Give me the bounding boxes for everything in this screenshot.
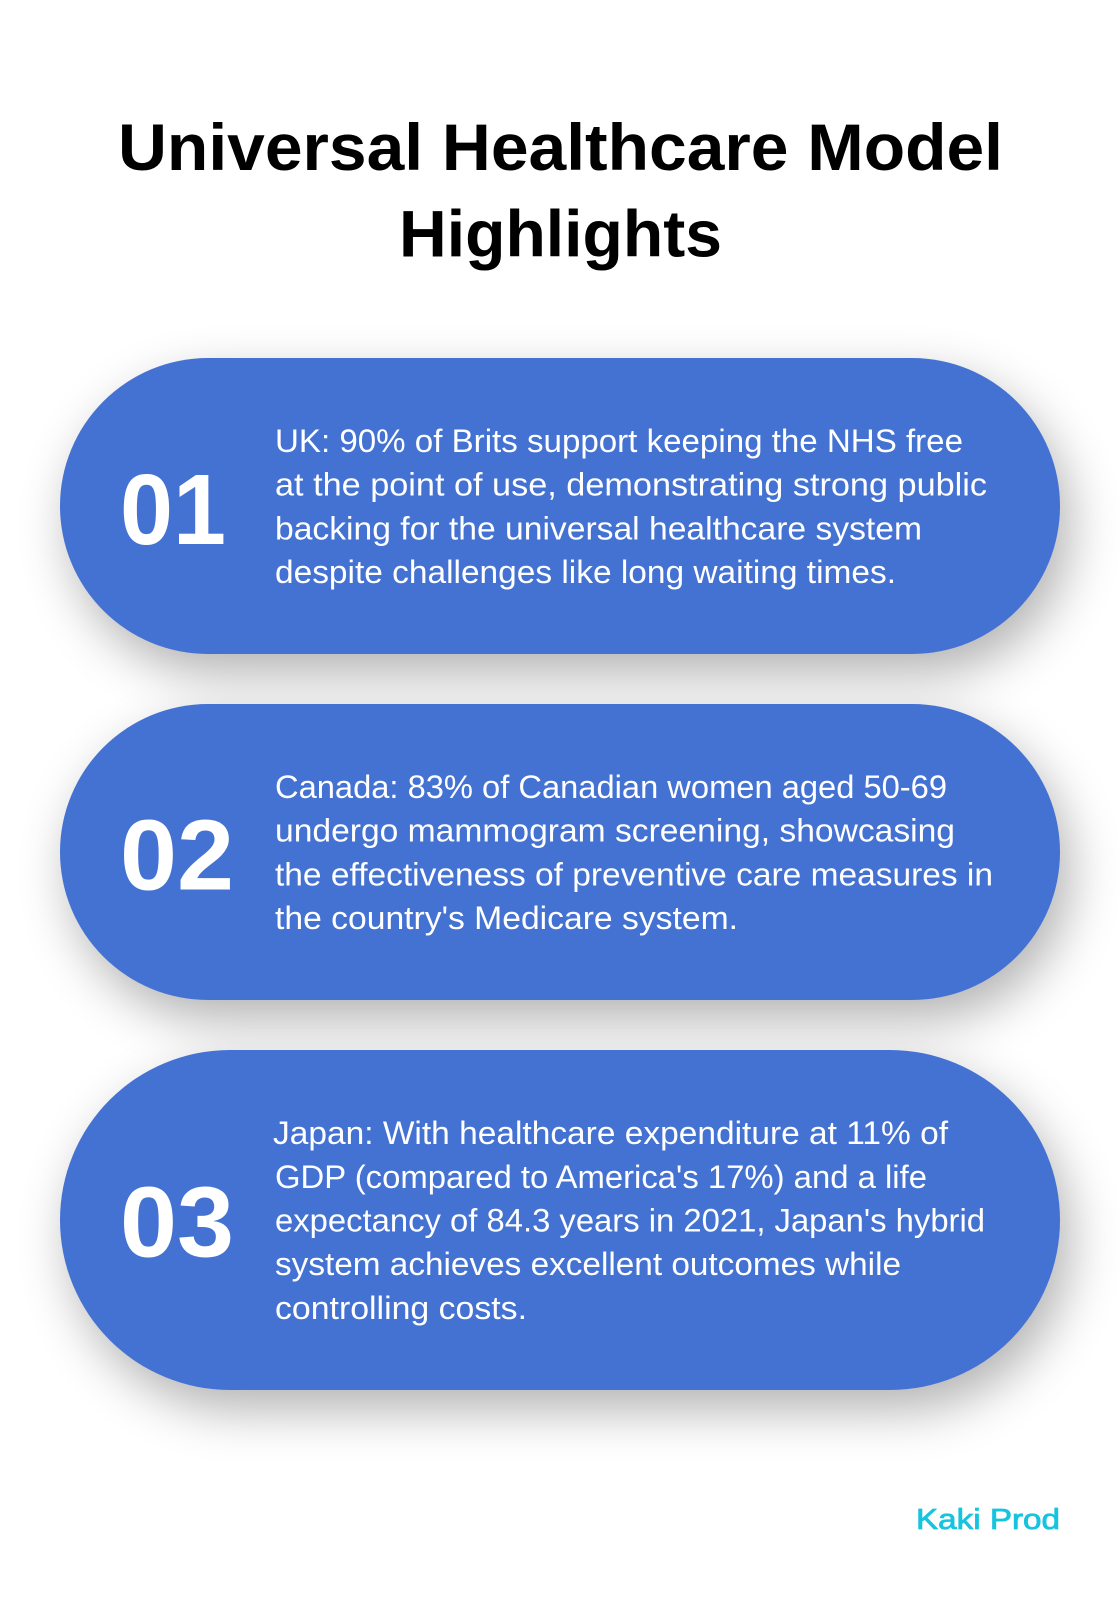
text block: Canada: Canada: 83% of Canadian women aged 50-69 — [275, 769, 947, 805]
title: Highlights — [399, 196, 722, 270]
panel: Japan — [60, 1050, 1060, 1390]
text block: Japan: GDP (compared to America's 17%) and a life — [275, 1159, 927, 1195]
text block: Canada: the country's Medicare system. — [275, 900, 738, 936]
title — [118, 110, 1003, 270]
text block: UK: despite challenges like long waiting times. — [275, 554, 896, 590]
text block: Canada — [275, 769, 993, 936]
text block: Japan: controlling costs. — [275, 1290, 527, 1326]
panel: Canada — [60, 704, 1060, 1000]
number 03: 03 — [120, 1166, 234, 1278]
panel: UK — [60, 358, 1060, 654]
text block: Canada: the effectiveness of preventive care measures in — [275, 856, 993, 892]
text block: Japan: system achieves excellent outcomes while — [275, 1246, 901, 1282]
text block: Canada: undergo mammogram screening, showcasing — [275, 813, 955, 849]
number 01: 01 — [120, 454, 226, 566]
text block: UK: backing for the universal healthcare system — [275, 510, 922, 546]
logo: Kaki Prod: Kaki Prod — [916, 1504, 1060, 1536]
text block: UK: at the point of use, demonstrating strong public — [275, 467, 987, 503]
text block: UK — [275, 423, 987, 590]
text block: Japan: Japan: With healthcare expenditure at 11% of — [273, 1115, 948, 1151]
text block: Japan — [273, 1115, 985, 1326]
number 02: 02 — [120, 800, 234, 912]
text block: Japan: expectancy of 84.3 years in 2021, Japan's hybrid — [275, 1202, 985, 1238]
text block: UK: UK: 90% of Brits support keeping the NHS free — [275, 423, 963, 459]
title: Universal Healthcare Model — [118, 110, 1003, 184]
